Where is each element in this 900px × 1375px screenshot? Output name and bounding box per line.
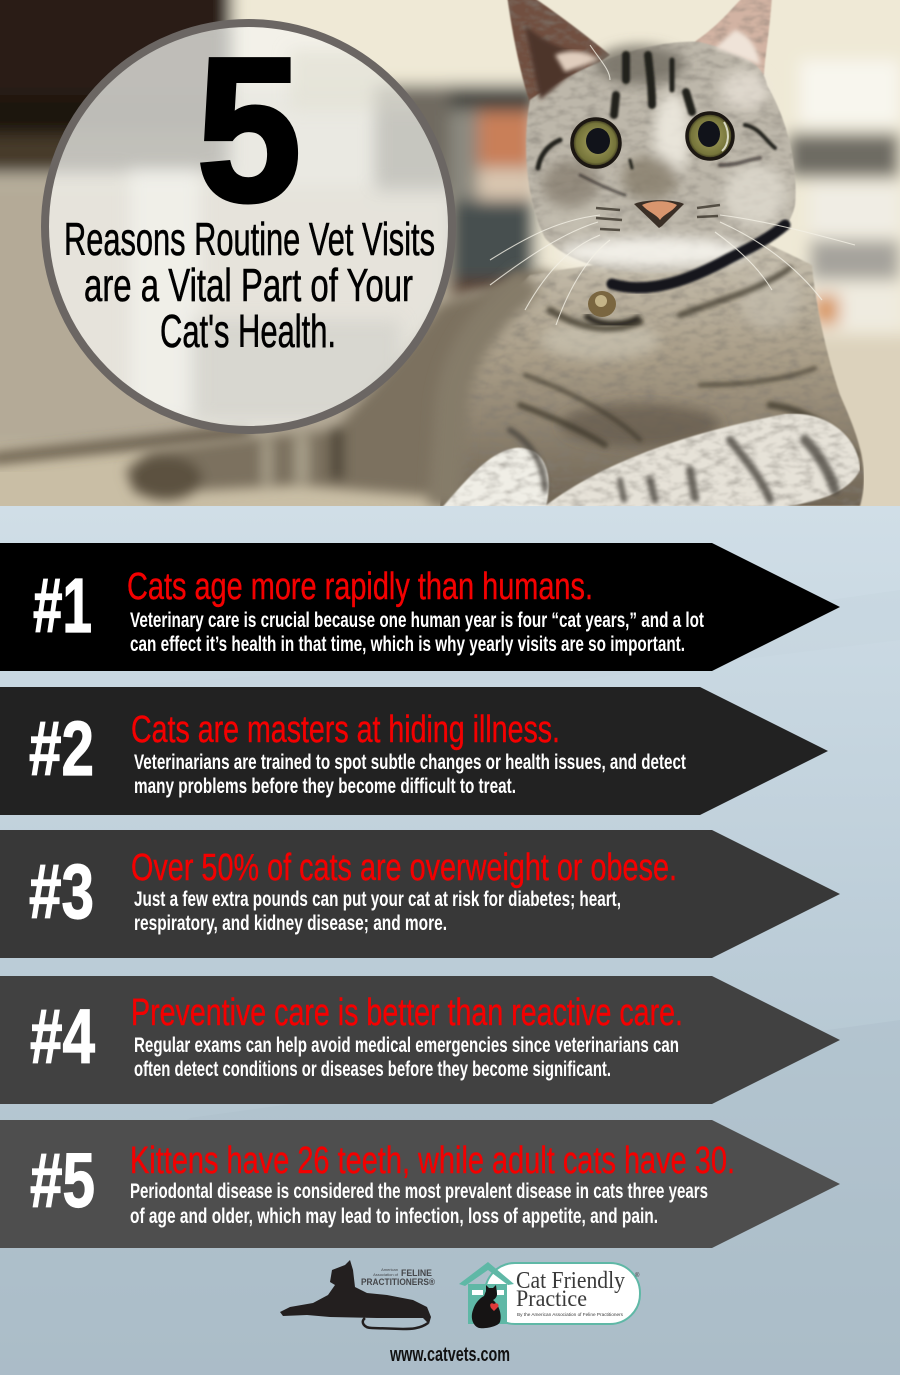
title circle badge [40, 16, 465, 430]
light and shadow fur patches [540, 45, 800, 447]
number 1: #1 [33, 563, 92, 649]
wordmark: Practice [516, 1286, 587, 1311]
wordmark: Association of [373, 1272, 399, 1277]
big number 5: 5 [197, 16, 301, 244]
muzzle marks [596, 205, 720, 230]
body 1 [130, 609, 704, 656]
title text: Cat's Health. [160, 305, 336, 357]
white pill badge [485, 1263, 640, 1324]
far body and outstretched leg [120, 263, 564, 506]
wordmark: FELINE [401, 1268, 432, 1279]
whiskers [490, 45, 855, 325]
wordmark [516, 1268, 640, 1317]
number 2: #2 [29, 706, 94, 792]
body 2: many problems before they become difficult to treat. [134, 775, 516, 798]
body 3: respiratory, and kidney disease; and more. [134, 912, 447, 935]
body 5 [130, 1180, 708, 1228]
heading 3: Over 50% of cats are overweight or obese. [131, 847, 677, 889]
body 4 [134, 1034, 679, 1081]
body 3: Just a few extra pounds can put your cat at risk for diabetes; heart, [134, 888, 621, 911]
body 4: often detect conditions or diseases before they become significant. [134, 1058, 611, 1081]
arrow panel 4 [0, 976, 840, 1104]
body 4: Regular exams can help avoid medical emergencies since veterinarians can [134, 1034, 679, 1057]
title text: are a Vital Part of Your [84, 259, 413, 311]
forehead and face markings [538, 55, 775, 195]
wordmark: ® [635, 1272, 640, 1279]
logo: American Association of Feline Practitioners [280, 1260, 435, 1329]
eyes [572, 113, 733, 167]
photo: tabby cat lying on floor [0, 0, 900, 540]
nose [634, 200, 684, 228]
arrow panel 1 [0, 543, 840, 671]
wordmark: American [381, 1267, 398, 1272]
blue background panel [0, 506, 900, 1375]
logo: Cat Friendly Practice [459, 1262, 640, 1328]
ears [507, 0, 610, 110]
number 3: #3 [29, 849, 94, 935]
title text: Reasons Routine Vet Visits [64, 213, 435, 265]
circle inner tones [57, 28, 444, 419]
cat body, head and limbs with fur texture [440, 0, 864, 506]
photo background [0, 0, 900, 540]
arrow panel 5 [0, 1120, 840, 1248]
wordmark: By the American Association of Feline Practitioners [517, 1312, 624, 1317]
icon: teal house [459, 1262, 514, 1324]
number 5: #5 [30, 1138, 95, 1224]
body 1: Veterinary care is crucial because one human year is four “cat years,” and a lot [130, 609, 704, 632]
wordmark: Cat Friendly [516, 1268, 625, 1294]
wordmark: PRACTITIONERS® [361, 1277, 435, 1288]
bell [585, 291, 640, 324]
body 5: of age and older, which may lead to infection, loss of appetite, and pain. [130, 1205, 658, 1228]
collar [612, 225, 785, 288]
foreground arms [440, 414, 860, 510]
body 2 [134, 751, 686, 798]
heading 1: Cats age more rapidly than humans. [127, 566, 593, 608]
icon: lying cat silhouette [280, 1260, 431, 1329]
heading 4: Preventive care is better than reactive care. [131, 992, 683, 1034]
arm stripes [510, 430, 835, 500]
chest stripes [520, 268, 855, 455]
icon: black cat with red heart [472, 1285, 501, 1328]
floor shadow line [0, 425, 250, 464]
body 1: can effect it’s health in that time, which is why yearly visits are so important. [130, 633, 685, 656]
arrow panel 3 [0, 830, 840, 958]
soft body edge [445, 280, 530, 506]
body 3 [134, 888, 621, 935]
wordmark [361, 1267, 435, 1288]
title text [64, 213, 435, 357]
website url: www.catvets.com [389, 1344, 510, 1366]
head [526, 42, 796, 273]
body 2: Veterinarians are trained to spot subtle changes or health issues, and detect [134, 751, 686, 774]
arrow panel 2 [0, 687, 828, 815]
cat body [440, 240, 864, 506]
heading 2: Cats are masters at hiding illness. [131, 709, 560, 751]
ear detail [524, 26, 580, 102]
number 4: #4 [30, 994, 95, 1080]
